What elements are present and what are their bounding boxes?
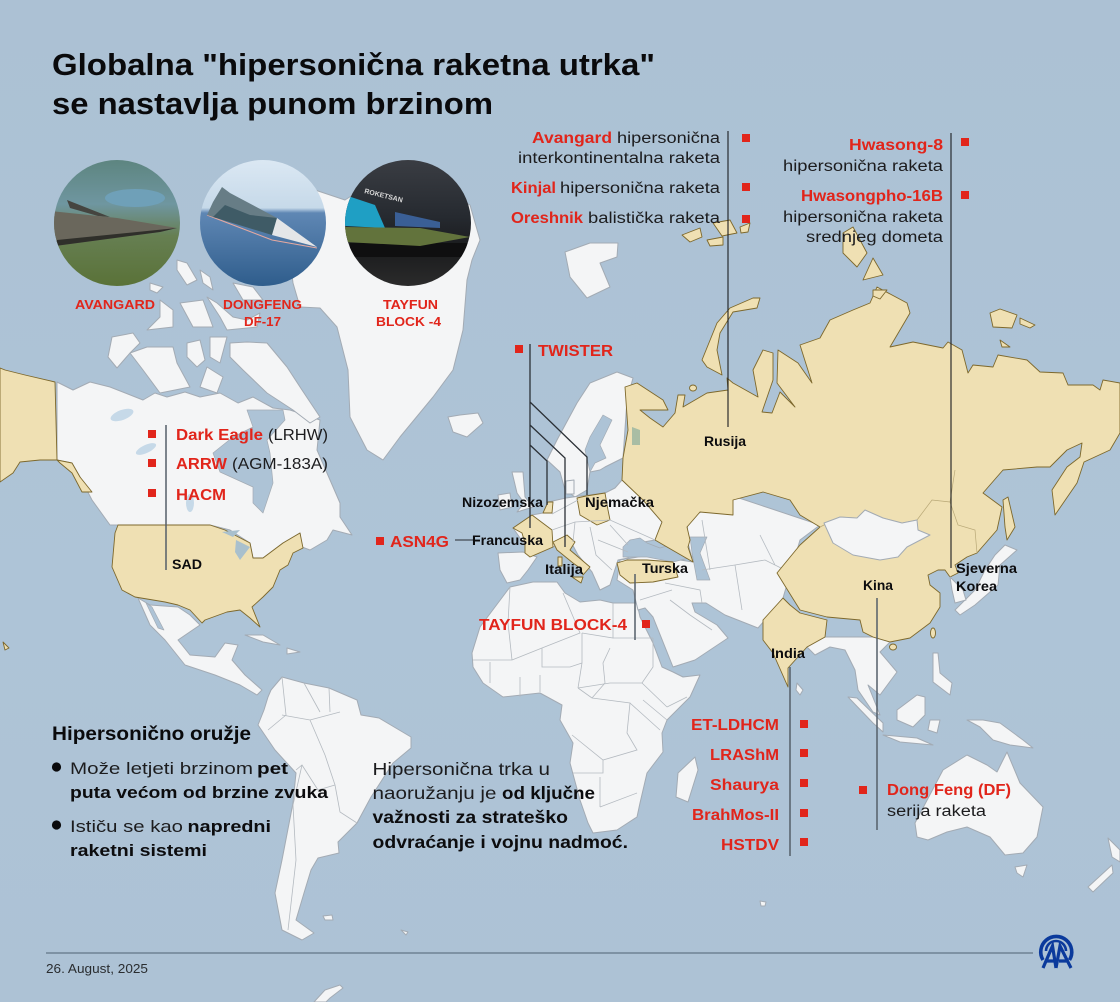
callout: India missiles: LRAShM (710, 747, 779, 764)
country labels (462, 434, 1018, 661)
map: Africa (472, 582, 700, 833)
photo captions: DF-17 (244, 314, 281, 329)
map: small southern islands (314, 901, 766, 1002)
callout: Russia missiles: balistička raketa (588, 210, 720, 227)
map: highlighted Italy (553, 535, 590, 583)
map: Russian Arctic islands (682, 220, 1035, 650)
text block: hypersonic race: odvraćanje i vojnu nadmoć. (372, 832, 628, 852)
text block: hypersonic weapons: Ističu se kao (70, 817, 183, 836)
callout: Russia missiles: hipersonična raketa (560, 180, 720, 197)
callout: USA missiles: Dark Eagle (176, 427, 263, 444)
callout: North Korea missiles: Hwasong-8 (849, 137, 943, 154)
text block: hypersonic race: od ključne (502, 783, 595, 803)
text block: hypersonic weapons: Može letjeti brzinom (70, 759, 253, 778)
map: Greenland (290, 165, 480, 460)
title (52, 47, 655, 121)
text block: hypersonic weapons: napredni (188, 817, 271, 836)
map: South America (258, 677, 411, 940)
map: Alaska (USA) (0, 368, 92, 650)
callout: China missiles: serija raketa (887, 803, 986, 820)
photo captions: BLOCK -4 (376, 314, 442, 329)
callout: ASN4G (376, 534, 480, 551)
photo captions: AVANGARD (75, 297, 155, 312)
map: Japan and Sri Lanka (796, 545, 1017, 695)
photo captions: DONGFENG (223, 297, 302, 312)
photo: Tayfun Block-4: ROKETSAN (364, 188, 403, 204)
map: Australia and New Zealand (915, 752, 1120, 892)
icon: Anadolu Agency logo (1041, 936, 1072, 968)
callout: India missiles (691, 667, 808, 856)
callout: Russia missiles (511, 130, 750, 427)
country labels: Kina (863, 578, 893, 593)
text block: hypersonic weapons: Hipersonično oružje (52, 724, 251, 745)
callout: North Korea missiles: hipersonična raketa (783, 158, 943, 175)
map: Canada and Arctic islands (57, 260, 352, 558)
text block: hypersonic race: Hipersonična trka u (372, 759, 550, 779)
callout: TWISTER: TWISTER (538, 343, 613, 360)
text block: hypersonic weapons (52, 724, 329, 860)
text block: hypersonic weapons: pet (257, 759, 288, 778)
title: se nastavlja punom brzinom (52, 86, 493, 121)
country labels: Francuska (472, 533, 544, 548)
callout: North Korea missiles (783, 133, 969, 568)
country labels: Nizozemska (462, 495, 544, 510)
callout: Tayfun Block-4: TAYFUN BLOCK-4 (479, 617, 627, 634)
callout: North Korea missiles: hipersonična raketa (783, 209, 943, 226)
map: Indonesia and Philippines (848, 653, 1033, 748)
callout: USA missiles: SAD (172, 557, 202, 572)
callout: Russia missiles: Oreshnik (511, 210, 583, 227)
callout: USA missiles: HACM (176, 487, 226, 504)
map: highlighted Netherlands (543, 502, 553, 513)
photo: Tayfun Block-4 (345, 160, 471, 286)
callout: China missiles (859, 598, 1011, 830)
country labels: Turska (642, 561, 689, 576)
map: highlighted India (763, 598, 827, 687)
callout: India missiles: ET-LDHCM (691, 717, 779, 734)
country labels: Sjeverna (956, 561, 1018, 576)
footer rule and date: 26. August, 2025 (46, 962, 148, 976)
country labels: Rusija (704, 434, 747, 449)
callout: Tayfun Block-4 (479, 574, 650, 640)
callout: North Korea missiles: srednjeg dometa (806, 229, 943, 246)
map: Middle East and Central Asia (617, 495, 820, 667)
map: USA (112, 525, 303, 627)
callout: USA missiles: (AGM-183A) (232, 456, 328, 473)
map: Black Sea (623, 538, 693, 562)
map: Mexico and Central America (138, 598, 300, 695)
callout: China missiles: Dong Feng (DF) (887, 782, 1011, 799)
photo captions: TAYFUN (383, 297, 438, 312)
map: Scandinavia (547, 372, 633, 497)
callout: USA missiles (148, 425, 328, 572)
callout: Russia missiles: Avangard (532, 130, 612, 147)
photo: Dongfeng DF-17 (200, 160, 326, 286)
country labels: Njemačka (585, 495, 655, 510)
map: highlighted Poland (577, 493, 610, 525)
map: continental Europe (498, 480, 662, 590)
text block: hypersonic race: važnosti za strateško (372, 807, 568, 827)
text block: hypersonic weapons: puta većom od brzine zvuka (70, 783, 329, 802)
country labels: Korea (956, 579, 998, 594)
callout: Russia missiles: interkontinentalna raketa (518, 150, 720, 167)
callout: Russia missiles: hipersonična (617, 130, 720, 147)
callout: Russia missiles: Kinjal (511, 180, 556, 197)
callout: TWISTER (515, 343, 613, 547)
callout: India missiles: Shaurya (710, 777, 779, 794)
map: Madagascar (676, 757, 698, 802)
callout: India missiles: BrahMos-II (692, 807, 779, 824)
map: highlighted Turkey (617, 560, 678, 583)
map: UK and Ireland (498, 472, 533, 512)
map: Iceland (448, 413, 483, 437)
text block: hypersonic race: naoružanju je (372, 783, 496, 803)
callout: ASN4G: ASN4G (390, 534, 449, 551)
text block: hypersonic race (372, 759, 628, 852)
map: Svalbard (565, 243, 618, 298)
title: Globalna "hipersonična raketna utrka" (52, 47, 655, 82)
map: highlighted France (513, 515, 553, 557)
map: South-East Asia (807, 637, 897, 715)
country labels: India (771, 646, 806, 661)
callout: India missiles: HSTDV (721, 837, 779, 854)
callout: USA missiles: ARRW (176, 456, 228, 473)
text block: hypersonic weapons: raketni sistemi (70, 841, 207, 860)
photo captions (75, 297, 442, 329)
map: Russia and China (622, 287, 1120, 642)
country labels: Italija (545, 562, 584, 577)
photo: Avangard (50, 160, 180, 286)
callout: North Korea missiles: Hwasongpho-16B (801, 188, 943, 205)
map: Europe borders (552, 500, 655, 570)
callout: USA missiles: (LRHW) (268, 427, 328, 444)
